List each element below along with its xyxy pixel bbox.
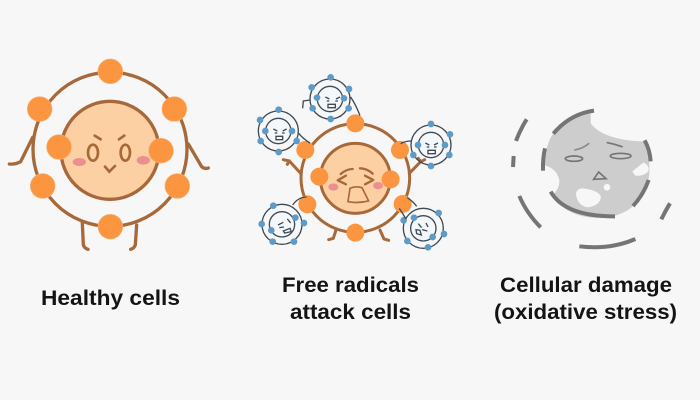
outer ring xyxy=(301,124,410,232)
nucleus xyxy=(320,143,390,213)
label: cellular damage (oxidative stress) xyxy=(494,274,677,324)
nucleus xyxy=(61,101,159,199)
electrons xyxy=(296,114,412,242)
white damage spots xyxy=(576,163,649,207)
electrons xyxy=(27,59,190,239)
limbs xyxy=(283,158,425,240)
limbs xyxy=(9,137,208,249)
face xyxy=(73,136,150,172)
sad face xyxy=(565,143,631,179)
free radical 4 xyxy=(258,197,307,245)
outer ring xyxy=(33,72,187,226)
label: cellular damage (oxidative stress): Cellular damage xyxy=(500,274,672,297)
panel: cellular damage illustration xyxy=(513,111,670,247)
label: cellular damage (oxidative stress): (oxidative stress) xyxy=(494,301,677,324)
membrane fragments xyxy=(513,111,670,247)
free radical 3 xyxy=(401,121,453,169)
crying face xyxy=(328,168,383,203)
free radical 5 xyxy=(399,198,447,251)
label: healthy cells: Healthy cells xyxy=(41,287,180,310)
panel: free radicals attack cell illustration xyxy=(257,74,453,251)
free radical 1 xyxy=(303,74,360,122)
damaged nucleus xyxy=(544,111,649,218)
label: free radicals attack cells xyxy=(282,274,419,324)
label: free radicals attack cells: attack cells xyxy=(290,301,411,324)
panel: healthy cell illustration xyxy=(9,59,208,249)
label: free radicals attack cells: Free radicals xyxy=(282,274,419,297)
free radical 2 xyxy=(257,106,310,155)
